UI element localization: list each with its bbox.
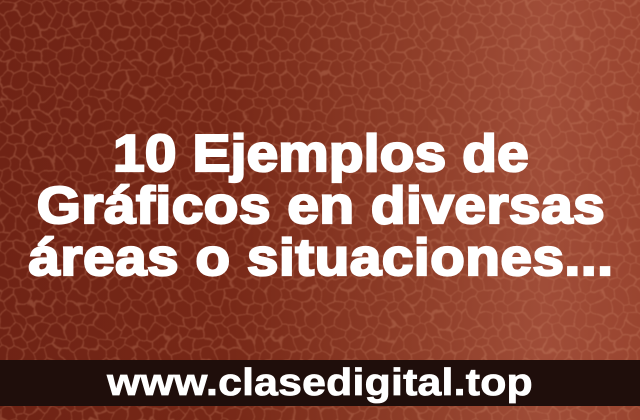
footer url: www.clasedigital.top <box>107 362 533 404</box>
footer band <box>0 360 640 406</box>
title line 2: Gráficos en diversas <box>37 177 605 235</box>
title <box>28 125 614 287</box>
title line 3: áreas o situaciones... <box>28 229 614 287</box>
title line 1: 10 Ejemplos de <box>113 125 529 183</box>
